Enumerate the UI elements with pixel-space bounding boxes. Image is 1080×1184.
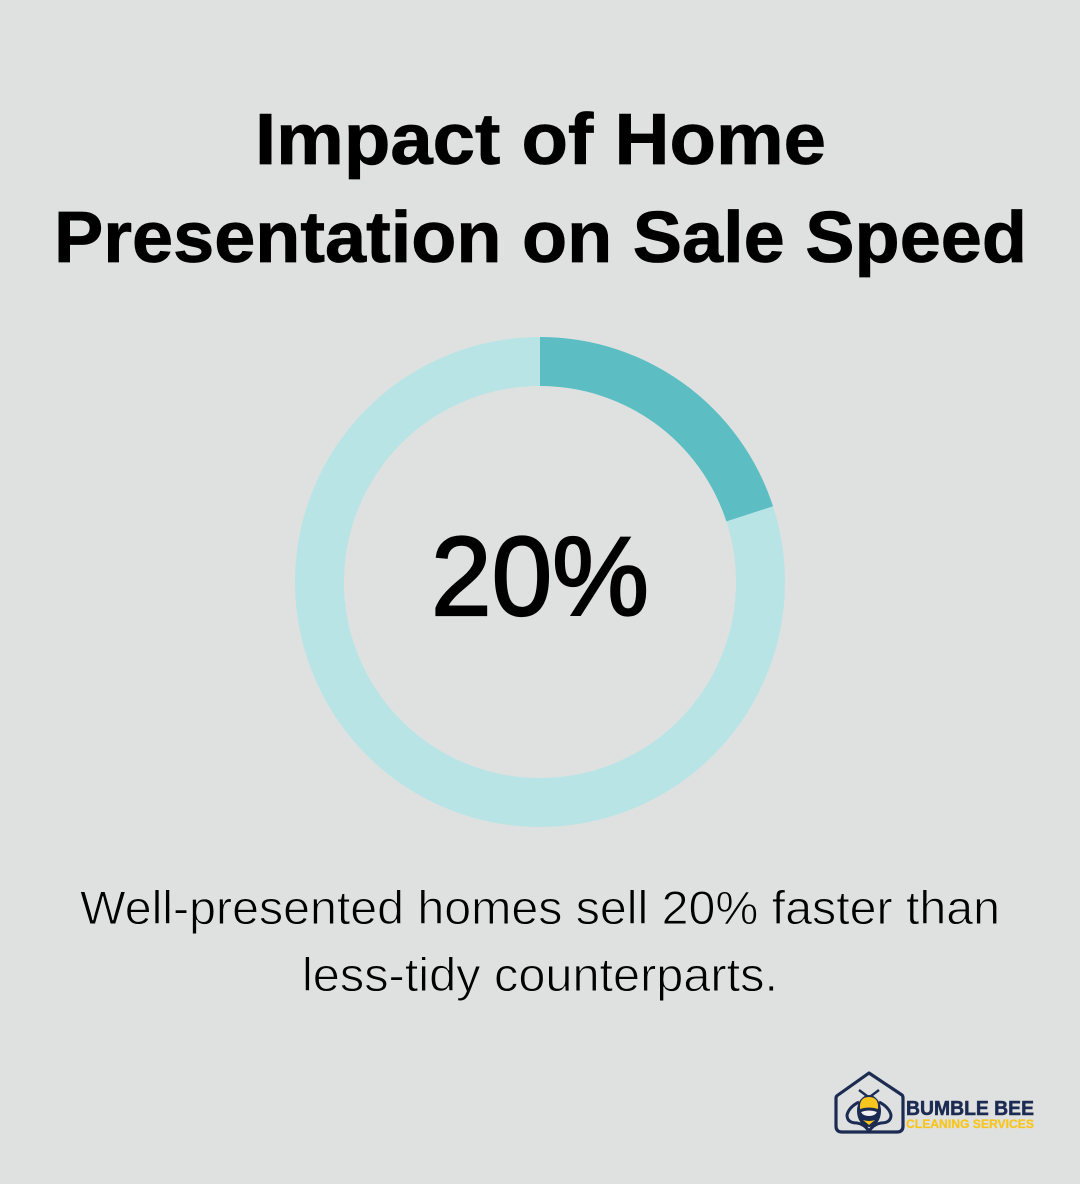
donut track (320, 362, 760, 802)
donut highlighted segment (540, 337, 773, 521)
description text: Well-presented homes sell 20% faster than (80, 881, 1000, 934)
title (54, 100, 1027, 278)
center value: 20% (431, 514, 649, 639)
description text: less-tidy counterparts. (302, 948, 778, 1001)
logo wordmark: BUMBLE BEE (906, 1098, 1034, 1120)
logo tagline: CLEANING SERVICES (906, 1117, 1034, 1131)
description text (80, 881, 1000, 1001)
title: Presentation on Sale Speed (54, 198, 1027, 278)
donut chart: 20 percent (320, 337, 773, 802)
icon: house with bee (836, 1073, 903, 1132)
title: Impact of Home (255, 100, 826, 180)
logo: Bumble Bee Cleaning Services (836, 1073, 1034, 1132)
